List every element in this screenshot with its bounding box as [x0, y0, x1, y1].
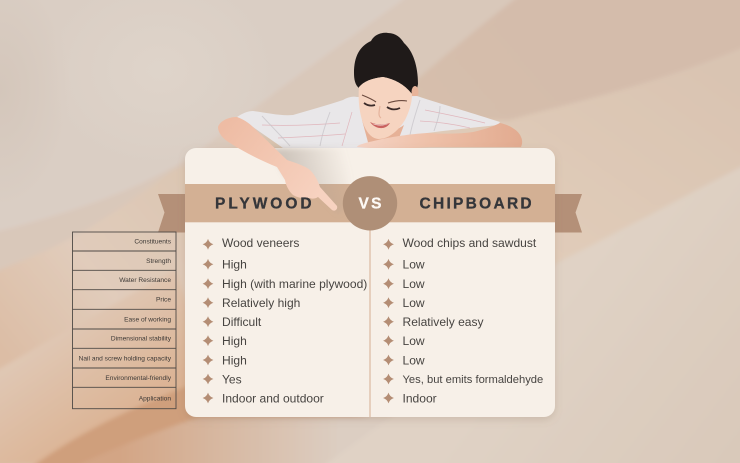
ear	[412, 86, 418, 98]
plywood list: Indoor and outdoor	[222, 391, 324, 405]
chipboard list	[402, 236, 543, 405]
criteria table: Strength	[146, 258, 171, 265]
arm: right with hand	[357, 123, 522, 148]
hair	[354, 33, 418, 94]
criteria table	[72, 232, 176, 409]
plywood list: High	[222, 334, 247, 348]
chipboard list: Relatively easy	[402, 315, 484, 329]
plywood list	[222, 236, 367, 405]
chipboard list: Low	[402, 334, 425, 348]
criteria table: Water Resistance	[119, 277, 171, 284]
plywood list: Relatively high	[222, 296, 300, 310]
arm shadow on card	[270, 148, 352, 214]
plywood list: High (with marine plywood)	[222, 277, 367, 291]
ribbon: right	[554, 194, 582, 232]
chipboard list: Low	[402, 353, 425, 367]
neck	[362, 120, 404, 146]
VS badge: VS	[358, 196, 382, 212]
criteria table: Nail and screw holding capacity	[79, 355, 172, 362]
blouse stripes and folds	[262, 100, 485, 146]
woman figure	[237, 33, 522, 148]
criteria table: Ease of working	[124, 316, 171, 323]
chipboard list: Wood chips and sawdust	[402, 236, 537, 250]
plywood list: High	[222, 258, 247, 272]
chipboard list: Low	[402, 258, 425, 272]
criteria table: Application	[139, 395, 171, 402]
heading: plywood: PLYWOOD	[215, 196, 313, 212]
plywood list: High	[222, 353, 247, 367]
criteria table: Dimensional stability	[111, 336, 172, 343]
plywood list: Difficult	[222, 315, 262, 329]
criteria table: Environmental-friendly	[105, 375, 172, 382]
criteria table: Constituents	[134, 239, 172, 246]
ribbon: left	[158, 194, 186, 232]
arm: left pointing hand	[218, 117, 337, 211]
plywood list: Wood veneers	[222, 236, 299, 250]
face	[359, 77, 412, 139]
chipboard list: Indoor	[402, 391, 437, 405]
chipboard list: Yes, but emits formaldehyde	[402, 374, 543, 386]
criteria table: Price	[156, 297, 171, 304]
blouse	[237, 96, 500, 148]
chipboard list: Low	[402, 296, 425, 310]
chipboard list: Low	[402, 277, 425, 291]
VS badge	[343, 176, 397, 230]
panel: comparison card	[185, 148, 555, 417]
heading: chipboard: CHIPBOARD	[420, 196, 533, 212]
plywood list: Yes	[222, 372, 242, 386]
facial features	[362, 95, 407, 128]
star bullets	[203, 239, 394, 403]
